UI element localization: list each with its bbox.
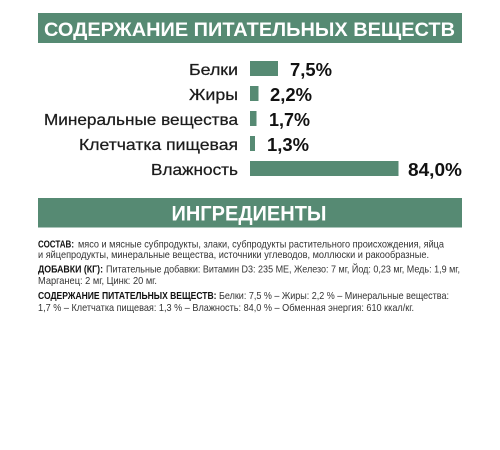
text block: composition: мясо и мясные субпродукты, злаки, субпродукты растительного происхождения, яйца xyxy=(78,238,444,250)
panel: nutrients heading xyxy=(38,13,462,43)
row: fibre: Клетчатка пищевая xyxy=(79,137,238,154)
row: protein: Белки xyxy=(189,62,238,79)
text block: composition: СОСТАВ: xyxy=(38,239,74,250)
row: minerals: Минеральные вещества xyxy=(44,112,238,129)
panel: ingredients heading: ИНГРЕДИЕНТЫ xyxy=(172,202,326,226)
text block: nutrient content: Белки: 7,5 % – Жиры: 2,2 % – Минеральные вещества: xyxy=(219,291,449,302)
row: fat: Жиры xyxy=(189,87,238,104)
bar chart: nutrients xyxy=(44,60,462,180)
row: protein xyxy=(189,60,332,80)
row: fat xyxy=(189,85,312,105)
row: minerals: 1,7% xyxy=(269,110,310,130)
text block: composition xyxy=(38,238,444,261)
panel: nutrients heading: СОДЕРЖАНИЕ ПИТАТЕЛЬНЫХ ВЕЩЕСТВ xyxy=(44,20,455,41)
panel: ingredients heading xyxy=(38,198,462,228)
row: fibre xyxy=(79,135,309,155)
text block: nutrient content: СОДЕРЖАНИЕ ПИТАТЕЛЬНЫХ ВЕЩЕСТВ: xyxy=(38,291,216,302)
row: protein: 7,5% xyxy=(290,60,332,80)
text block: additives: Марганец: 2 мг, Цинк: 20 мг. xyxy=(38,276,157,287)
text block: additives: ДОБАВКИ (КГ): xyxy=(38,264,103,275)
text block: additives xyxy=(38,262,460,287)
text block: nutrient content: 1,7 % – Клетчатка пищевая: 1,3 % – Влажность: 84,0 % – Обменная энергия: 610 ккал/кг. xyxy=(38,302,414,314)
row: fat: 2,2% xyxy=(270,85,312,105)
row: minerals xyxy=(44,110,310,130)
row: moisture: 84,0% xyxy=(408,160,462,180)
row: fibre: 1,3% xyxy=(267,135,309,155)
text block: nutrient content xyxy=(38,291,449,314)
text block: composition: и яйцепродукты, минеральные вещества, источники углеводов, моллюски и ракообразные. xyxy=(38,249,429,261)
row: moisture: Влажность xyxy=(151,162,238,179)
row: moisture xyxy=(151,160,462,180)
